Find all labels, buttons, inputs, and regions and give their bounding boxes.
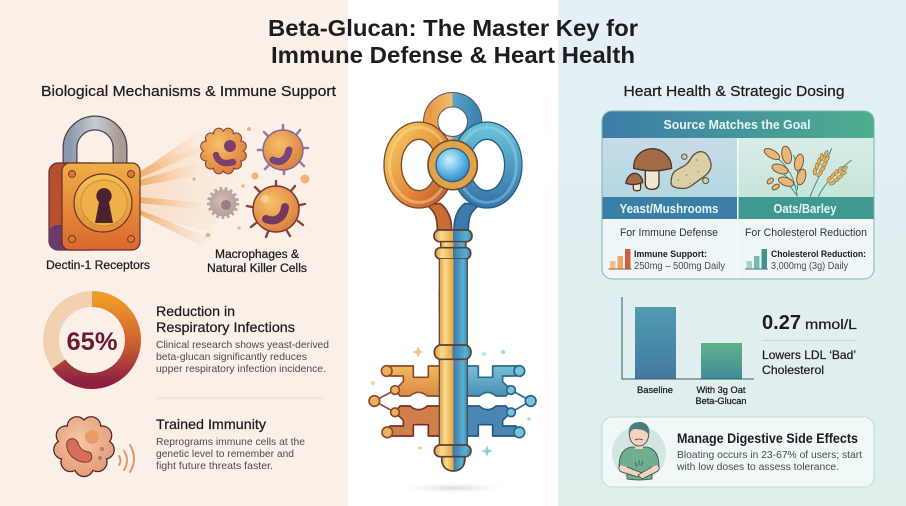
dose: immune support: Immune Support: [634,249,707,260]
label: oats / barley: Oats/Barley [774,201,837,216]
icon: person with bloating [612,422,666,480]
dose: cholesterol reduction [771,249,866,272]
cell: small grey cell [210,190,236,216]
text: digestive side effects: Manage Digestive Side Effects [677,431,858,446]
stat text: respiratory infections: upper respiratory infection incidence. [156,363,326,375]
stat: 0.27 mmol/L: 0.27 [762,312,801,334]
label: Dectin-1 Receptors: Dectin-1 Receptors [46,260,150,272]
text: digestive side effects [676,431,862,473]
label: macrophages and natural killer cells: Natural Killer Cells [207,263,307,275]
stat: 0.27 mmol/L: Lowers LDL ‘Bad’ [762,348,856,362]
dose: cholesterol reduction: 3,000mg (3g) Daily [771,261,848,272]
key bow [390,100,516,312]
donut chart: 65%: 65% [66,328,118,356]
stat text: respiratory infections: Clinical research shows yeast-derived [156,339,329,351]
icon: oats and barley [762,145,852,197]
stat: 0.27 mmol/L: mmol/L [805,316,857,332]
donut chart: 65% [51,299,133,381]
bit left [369,366,441,438]
cell: macrophage 2 [258,125,308,174]
heading: heart health: Heart Health & Strategic Dosing [624,83,844,100]
illustration: master key [369,100,536,471]
panel: biological mechanisms [41,83,337,477]
light beams [140,122,262,245]
text: for cholesterol reduction: For Cholesterol Reduction [745,227,867,239]
cell: macrophage 1 [201,128,246,174]
cell: natural killer [247,181,305,237]
bit right [466,366,536,438]
text: trained immunity: Trained Immunity [156,416,266,432]
heading: biological mechanisms: Biological Mechanisms & Immune Support [41,83,337,100]
stat: 0.27 mmol/L [762,312,857,377]
title [268,15,638,68]
card header text: Source Matches the Goal [664,118,810,132]
icon: mushrooms and yeast [626,149,711,191]
dose: immune support: 250mg – 500mg Daily [634,261,725,272]
title: Immune Defense & Heart Health [271,42,635,68]
card: digestive side effects [602,417,874,487]
bar chart: LDL cholesterol: Beta-Glucan [696,396,746,406]
text: for immune defense: For Immune Defense [620,227,718,239]
bar chart: LDL cholesterol: With 3g Oat [696,385,746,395]
stat text: respiratory infections [156,303,329,375]
text: trained immunity: fight future threats faster. [156,460,273,472]
card: source matches the goal [602,111,874,279]
stat text: respiratory infections: beta-glucan significantly reduces [156,351,307,363]
icon: teal mini bars [745,249,768,270]
particles [192,127,310,237]
icon: orange mini bars [608,249,632,270]
sparkles [371,346,531,457]
bar chart: LDL cholesterol: Baseline [637,385,673,395]
text: trained immunity: Reprograms immune cells at the [156,436,305,448]
icon: trained immune cell [54,417,134,477]
label: macrophages and natural killer cells: Macrophages & [215,249,299,261]
text: digestive side effects: Bloating occurs in 23-67% of users; start [677,449,862,461]
shadow under key [391,482,515,494]
title: Beta-Glucan: The Master Key for [268,15,638,41]
text: digestive side effects: with low doses to assess tolerance. [676,461,839,473]
label: macrophages and natural killer cells [207,249,307,275]
dose: cholesterol reduction: Cholesterol Reduction: [771,249,866,260]
stat text: respiratory infections: Respiratory Infections [156,319,295,335]
key bit and shaft [369,290,536,471]
stat text: respiratory infections: Reduction in [156,303,235,319]
stat: 0.27 mmol/L: Cholesterol [762,363,824,377]
icon: padlock [49,123,140,250]
text: trained immunity: genetic level to remember and [156,448,294,460]
dose: immune support [634,249,725,272]
text: trained immunity [156,416,305,472]
label: yeast / mushrooms: Yeast/Mushrooms [620,201,718,216]
bar chart: LDL cholesterol [622,297,754,406]
icon: immune cells [192,125,310,237]
panel: heart health and dosing [602,83,874,487]
